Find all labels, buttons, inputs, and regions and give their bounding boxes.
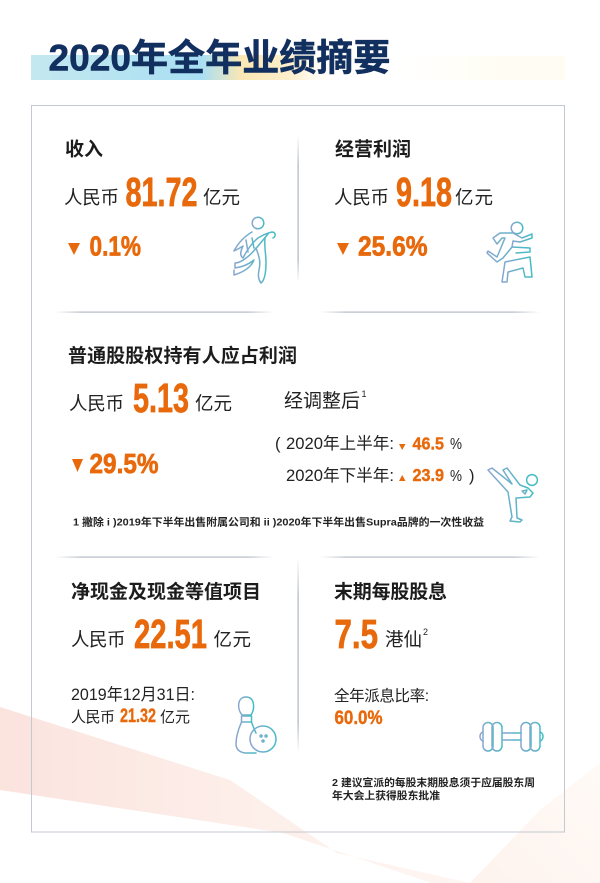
panel: revenue	[64, 138, 275, 283]
divider: revenue / operating profit	[298, 135, 299, 282]
first half change: 2020年上半年:	[286, 434, 394, 453]
title with gradient banner: 2020年全年业绩摘要	[48, 38, 390, 78]
operating profit amount: 人民币	[334, 187, 389, 208]
icon: hurdler	[487, 222, 532, 282]
footnote 2: 年大会上获得股东批准	[332, 789, 441, 802]
net cash amount: 亿元	[214, 629, 251, 650]
net cash amount: 22.51	[134, 611, 207, 657]
prior year comparison: 人民币	[71, 709, 115, 726]
dividend amount: 7.5	[334, 611, 378, 657]
attributable profit amount	[69, 375, 232, 421]
operating profit amount: 亿元	[455, 187, 493, 208]
payout ratio	[334, 687, 429, 729]
first half change	[275, 434, 462, 454]
second half change	[286, 465, 474, 485]
title with gradient banner	[31, 38, 565, 80]
footnote 2: 2 建议宣派的每股末期股息须于应届股东周	[332, 776, 535, 789]
operating profit change: 25.6%	[358, 230, 428, 262]
prior year comparison: 21.32	[120, 705, 156, 727]
prior year comparison	[71, 685, 195, 727]
heading: attributable profit: 普通股股权持有人应占利润	[68, 344, 297, 367]
payout ratio: 全年派息比率:	[334, 687, 429, 705]
net cash amount	[71, 611, 251, 657]
second half change: 2020年下半年:	[286, 466, 394, 485]
attributable profit amount: 人民币	[69, 393, 124, 414]
panel: net cash	[71, 580, 276, 753]
icon: ribbon dancer	[234, 217, 275, 283]
footnote 1: 1 撇除 i )2019年下半年出售附属公司和 ii )2020年下半年出售Supra品牌的一次性收益	[73, 516, 485, 528]
second half change: 23.9	[412, 465, 444, 485]
revenue change	[68, 230, 141, 262]
operating profit amount	[334, 169, 493, 215]
prior year comparison: 2019年12月31日:	[71, 685, 195, 704]
icon: bowling pin and ball	[236, 697, 276, 753]
second half change: )	[469, 467, 474, 485]
revenue amount: 人民币	[64, 187, 119, 208]
heading: final dividend: 末期每股股息	[334, 580, 447, 603]
panel: profit attributable to shareholders	[68, 344, 537, 528]
revenue amount: 81.72	[126, 169, 198, 215]
dividend amount	[334, 611, 428, 657]
panel: operating profit	[334, 138, 532, 282]
operating profit amount: 9.18	[396, 169, 452, 215]
payout ratio: 60.0%	[334, 708, 383, 729]
revenue amount: 亿元	[203, 187, 240, 208]
panel: final dividend	[332, 580, 543, 802]
first half change: %	[450, 436, 462, 453]
attributable profit amount: 5.13	[133, 375, 189, 421]
divider: middle row	[55, 556, 540, 558]
divider: cash / dividend	[298, 557, 299, 753]
second half change: %	[450, 468, 462, 485]
prior year comparison: 亿元	[160, 709, 190, 726]
adjusted label: 经调整后	[284, 390, 360, 412]
attributable profit amount: 亿元	[195, 393, 232, 414]
icon: dumbbell	[480, 722, 543, 751]
revenue change: 0.1%	[90, 230, 141, 262]
attributable profit change: 29.5%	[90, 448, 159, 479]
heading: net cash: 净现金及现金等值项目	[71, 580, 261, 603]
heading: operating profit: 经营利润	[335, 138, 411, 160]
divider: top row	[55, 312, 540, 313]
dividend amount: 港仙	[385, 629, 422, 650]
heading: revenue: 收入	[65, 138, 103, 160]
background: pink ribbon	[0, 707, 600, 883]
outer panel frame	[32, 106, 564, 832]
icon: high kick	[488, 468, 537, 522]
footnote 2	[332, 776, 535, 802]
dividend amount: 2	[423, 627, 428, 637]
adjusted label: 1	[362, 389, 367, 399]
first half change: 46.5	[412, 434, 444, 454]
first half change: (	[275, 435, 281, 453]
net cash amount: 人民币	[71, 629, 126, 650]
revenue amount	[64, 169, 240, 215]
